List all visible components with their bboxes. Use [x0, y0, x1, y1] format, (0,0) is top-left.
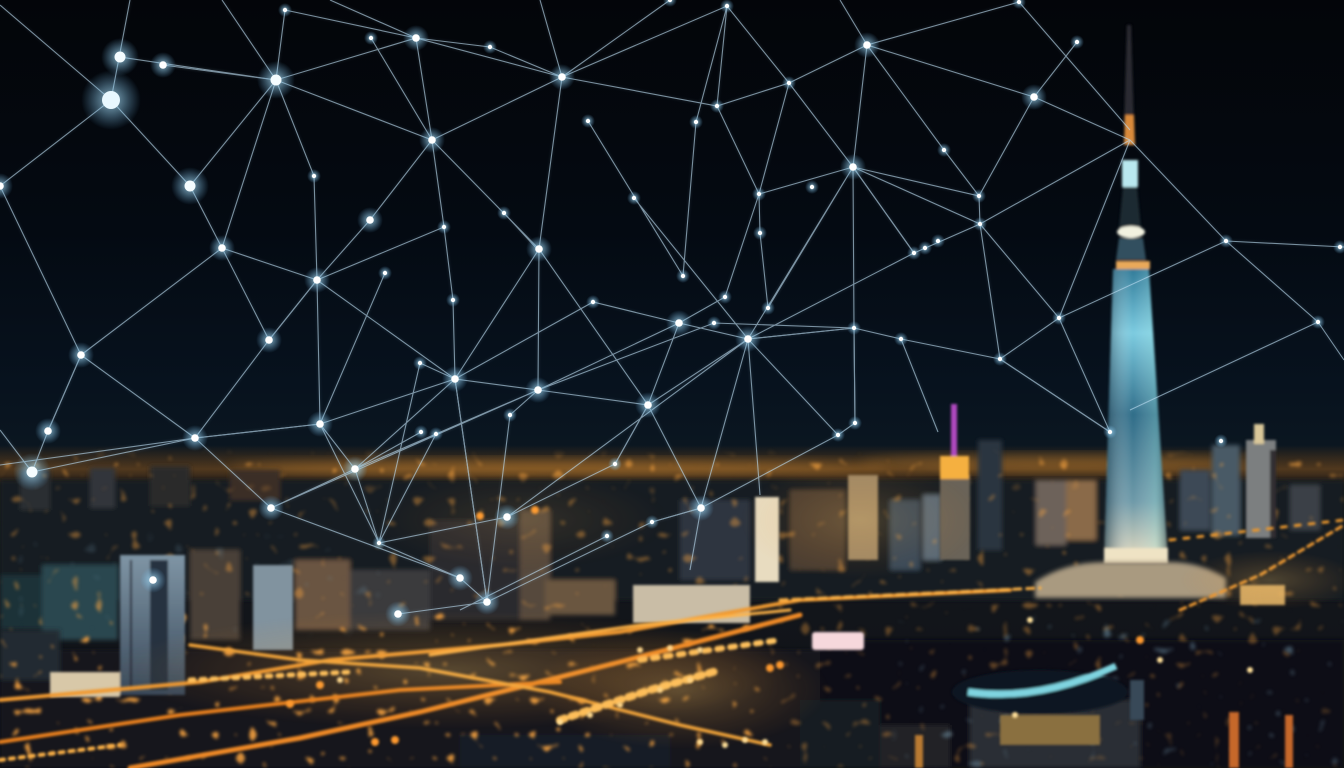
- bright street lights: [286, 506, 1253, 748]
- medium nodes: [0, 25, 1047, 627]
- building: left tower: [120, 555, 185, 695]
- building: window stripes lower right: [915, 712, 1293, 768]
- building: amber tower: [848, 475, 878, 560]
- city skyline: [0, 440, 1344, 640]
- building: lit plaza at the right: [1240, 585, 1285, 605]
- foreground blocks: [0, 630, 1344, 768]
- city light texture: [0, 440, 1344, 768]
- sign on the central building: [812, 632, 864, 650]
- building: low lit hall: [633, 585, 750, 623]
- large nodes: [13, 38, 295, 491]
- horizon glow: [0, 445, 1344, 485]
- building: orange crown tower: [940, 404, 970, 560]
- network lines: [0, 0, 1344, 614]
- small nodes: [278, 0, 1344, 550]
- building: white slab: [755, 497, 779, 582]
- soft glow of network lines: [0, 0, 1344, 614]
- building: low white block at the far left: [50, 672, 120, 697]
- tower base hall: [1035, 562, 1226, 598]
- roads of orange light: [0, 520, 1344, 768]
- building: right tower: [1246, 424, 1276, 538]
- building: pale block: [253, 565, 293, 650]
- main spire tower: [1104, 25, 1168, 564]
- lit buildings: [50, 404, 1293, 768]
- domed building with cyan arc: [952, 666, 1144, 720]
- ambient amber haze: [110, 460, 1344, 750]
